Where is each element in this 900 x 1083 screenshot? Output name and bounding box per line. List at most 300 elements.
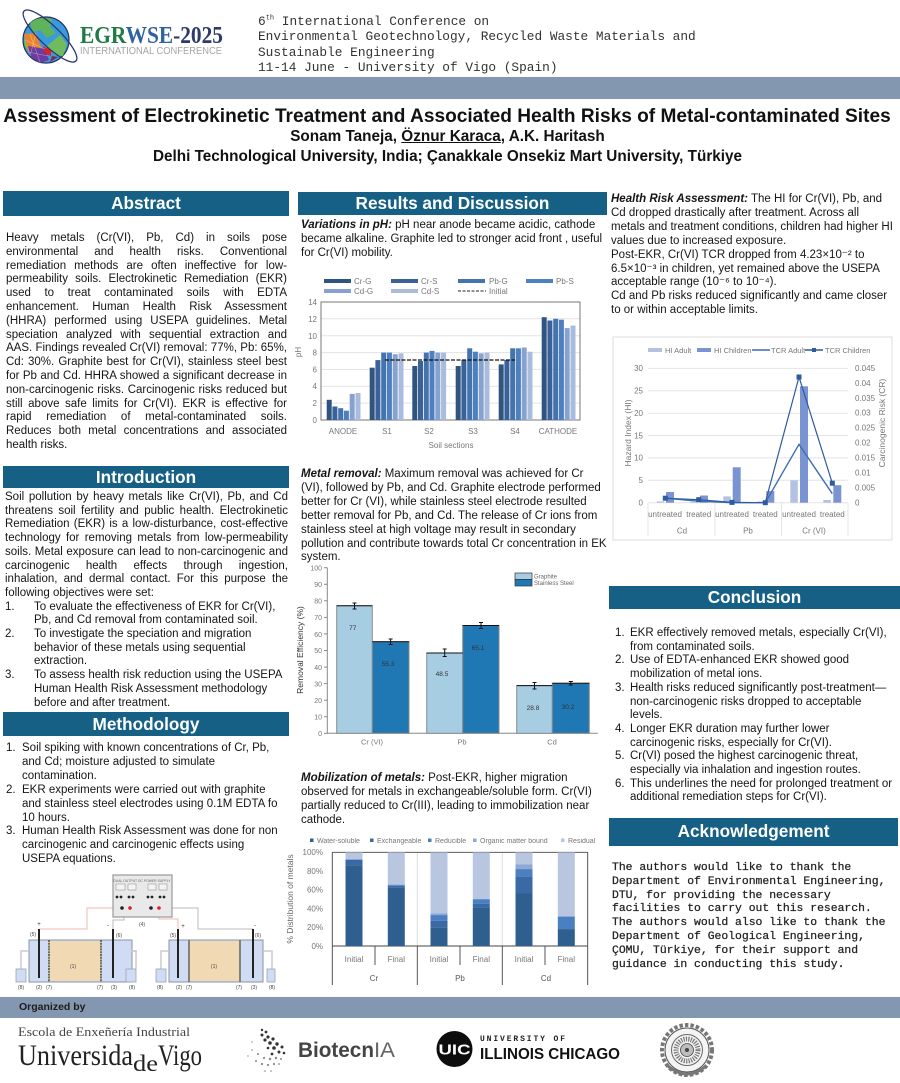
panel: health risk assessment text: Cd and Pb risks reduced significantly and came closer <box>611 290 887 302</box>
logo: Universidade de Vigo: Universida <box>18 1039 133 1072</box>
introduction text: To assess health risk reduction using the USEPA <box>34 669 282 681</box>
logo: University of Illinois Chicago <box>436 1031 620 1067</box>
axes: 40 <box>314 665 322 672</box>
introduction text <box>5 491 288 709</box>
methodology steps: USEPA equations. <box>22 853 116 865</box>
panel: abstract <box>3 191 289 451</box>
axis labels: 15 <box>634 431 644 440</box>
axis labels: treated <box>753 510 778 519</box>
heading: acknowledgement: Acknowledgement <box>678 821 829 841</box>
left cell: (1) <box>70 964 76 970</box>
heading: acknowledgement <box>609 818 898 846</box>
value labels: 30.2 <box>562 704 575 711</box>
initial pH dashed line <box>385 359 515 361</box>
heading: introduction: Introduction <box>96 467 196 487</box>
header: conference branding <box>22 9 696 75</box>
grid and axes: 14 <box>308 298 318 307</box>
conclusion list: non-carcinogenic risks dropped to acceptable <box>630 696 861 708</box>
axis labels: 0.03 <box>855 409 871 418</box>
text: metal removal: pollution and contribute towards total Cr concentration in EK <box>301 538 607 550</box>
axis labels: treated <box>686 510 711 519</box>
conclusion list: This underlines the need for prolonged treatment or <box>630 778 892 790</box>
heading: methodology <box>3 712 289 736</box>
axis labels: Cd <box>547 738 557 746</box>
value labels <box>349 625 575 712</box>
panel: health risk assessment text <box>611 193 893 316</box>
category labels: % Distribution of metals <box>285 854 295 944</box>
introduction text: extraction. <box>34 655 87 667</box>
axis labels: Cr (VI) <box>802 526 826 536</box>
panel: introduction <box>3 466 289 709</box>
heading: results and discussion <box>298 192 607 215</box>
logo: university seal <box>660 1023 714 1077</box>
legend: Pb-G <box>489 277 508 286</box>
acknowledgement text <box>612 862 885 971</box>
conclusion list: carcinogenic risks, especially for Cr(VI). <box>630 737 832 749</box>
bars <box>657 386 841 503</box>
axis labels: Removal Efficiency (%) <box>295 606 305 694</box>
legend: Cr-G <box>354 277 371 286</box>
axis labels: S3 <box>468 427 478 436</box>
axis labels: 20 <box>634 409 644 418</box>
axis labels: 30 <box>634 364 644 373</box>
axis labels: Soil sections <box>429 441 473 450</box>
axis labels: 0.035 <box>855 394 876 403</box>
axes and grid: 100% <box>303 848 323 857</box>
left cell: (3) <box>111 985 117 991</box>
abstract text: Cd: 30%. Graphite best for Cr(VI), stainless steel best <box>6 356 287 368</box>
acknowledgement text: The authors would like to thank the <box>612 862 851 874</box>
acknowledgement text: facilities to carry out this research. <box>612 903 872 915</box>
axis labels: 5 <box>639 476 644 485</box>
category labels: Initial <box>515 955 534 964</box>
logo: BiotecnIA: IA <box>374 1039 395 1062</box>
grid and axes: 12 <box>308 315 318 324</box>
conclusion list: additional remediation steps for Cr(VI). <box>630 791 827 803</box>
axes: 100 <box>310 566 322 572</box>
axes <box>310 566 598 738</box>
value labels: 55.3 <box>382 661 395 668</box>
logo: University of Illinois Chicago: ILLINOIS CHICAGO <box>480 1046 620 1063</box>
conclusion list: 4. <box>615 723 625 735</box>
logo: BiotecnIA <box>247 1028 395 1072</box>
text: variations in pH <box>301 219 602 259</box>
legend: Cr-S <box>421 277 437 286</box>
axis labels: Pb <box>457 738 467 746</box>
grid and axes: 0 <box>313 416 318 425</box>
heading: methodology: Methodology <box>93 714 199 734</box>
abstract text: used to treat contaminated soils with EDTA <box>6 287 287 299</box>
abstract text: environmental and health risks. Conventional <box>6 246 287 258</box>
conclusion list: 1. <box>615 627 625 639</box>
introduction text: To investigate the speciation and migration <box>34 628 251 640</box>
axis labels: 0.04 <box>855 379 871 388</box>
footer band <box>0 997 900 1018</box>
panel: health risk assessment text: 6.5×10⁻³ in children, yet remained above the USEPA <box>611 263 880 275</box>
abstract text: for Pb and Cd. HHRA showed a significant decrease in <box>6 370 287 382</box>
abstract text: rapid remediation of metal-contaminated soils. <box>6 411 287 423</box>
panel: acknowledgement <box>609 818 898 971</box>
axes: 50 <box>314 648 322 655</box>
panel: results and discussion <box>298 192 607 826</box>
axis labels: 10 <box>634 454 644 463</box>
value labels: 28.8 <box>527 705 540 712</box>
acknowledgement text: ÇOMU, Türkiye, for their support and <box>612 945 858 957</box>
conclusion list: 3. <box>615 682 625 694</box>
conference details: Sustainable Engineering <box>258 45 435 60</box>
text: mobilization of metals <box>301 772 592 826</box>
introduction text: inhalation, and dermal contact. For this purpose the <box>5 573 288 585</box>
left cell: (8) <box>129 985 135 991</box>
legend: TCR Children <box>825 346 870 355</box>
power supply <box>113 875 172 917</box>
axis labels: pH <box>294 347 303 357</box>
affiliations: Delhi Technological University, India; Çanakkale Onsekiz Mart University, Türkiye <box>153 148 742 165</box>
methodology steps: carcinogenic and carcinogenic effects using <box>22 839 244 851</box>
chart: pH by soil section <box>294 277 580 450</box>
methodology steps: and stainless steel electrodes using 0.1M EDTA for <box>22 798 277 810</box>
text: metal removal: better removal for Pb, and Cd. The release of Cr ions from <box>301 510 597 522</box>
abstract text: AAS. Findings revealed Cr(VI) removal: 77%, Pb: 65%, <box>6 342 287 354</box>
left cell: (6) <box>116 933 122 939</box>
legend <box>648 346 870 355</box>
stacked bars <box>346 852 575 946</box>
panel: health risk assessment text: Cd dropped drastically after treatment. Across all <box>611 207 859 219</box>
left cell: - <box>107 923 109 929</box>
category labels: Final <box>473 955 490 964</box>
axis labels: treated <box>820 510 845 519</box>
right cell: - <box>254 923 256 929</box>
heading: results and discussion: Results and Discussion <box>356 193 549 213</box>
category labels: Final <box>558 955 575 964</box>
axis labels: S2 <box>424 427 434 436</box>
logo: Universidade de Vigo: Escola de Enxeñería Industrial <box>18 1024 190 1039</box>
axis labels: 0.015 <box>855 454 876 463</box>
panel: health risk assessment text: Post-EKR, Cr(VI) TCR dropped from 4.23×10⁻² to <box>611 249 865 261</box>
category labels: Pb <box>455 974 465 983</box>
introduction text: Remediation (EKR) is a low-disturbance, cost-effective <box>5 518 288 530</box>
logo: EGRWSE-2025: EGRWSE-2025 <box>80 23 223 49</box>
axis labels <box>623 364 887 536</box>
heading: abstract: Abstract <box>111 193 181 213</box>
panel: health risk assessment text: acceptable range (10⁻⁶ to 10⁻⁴). <box>611 276 777 288</box>
text: metal removal <box>301 468 607 563</box>
conclusion list: especially via inhalation and ingestion routes. <box>630 764 861 776</box>
right cell: (3) <box>251 985 257 991</box>
axis labels: ANODE <box>329 427 357 436</box>
introduction text: Pb, and Cd removal from contaminated soil. <box>34 614 258 626</box>
methodology steps: Human Health Risk Assessment was done for non- <box>22 825 277 837</box>
legend: Graphite <box>534 574 558 580</box>
axes: 90 <box>314 582 322 589</box>
poster title: Assessment of Electrokinetic Treatment and Associated Health Risks of Metal-contaminated Sites <box>3 106 891 127</box>
abstract text: still above safe limits for Cr(VI). EKR is effective for <box>6 398 287 410</box>
legend: HI Adult <box>665 346 692 355</box>
axis labels: 0 <box>639 498 644 508</box>
axes: 0 <box>318 731 322 738</box>
category labels: Initial <box>430 955 449 964</box>
axes and grid: 20% <box>307 923 323 932</box>
introduction text: carcinogenic health effects through ingestion, <box>5 560 288 572</box>
conclusion list: Longer EKR duration may further lower <box>630 723 829 735</box>
axis labels: Hazard Index (HI) <box>623 399 633 467</box>
abstract text: Reduces both metal concentrations and associated <box>6 425 287 437</box>
grid and axes: 8 <box>313 348 318 358</box>
logo: University of Illinois Chicago: UIC <box>438 1042 471 1058</box>
axis labels: 0.005 <box>855 484 876 492</box>
diagram: electrokinetic setup <box>16 874 276 991</box>
right cell: (5) <box>170 933 176 939</box>
introduction text: before and after treatment. <box>34 697 170 709</box>
axis labels: Cd <box>677 526 687 536</box>
introduction text: following objectives were set: <box>5 587 154 599</box>
logos row <box>18 1023 714 1077</box>
logo: Universidade de Vigo: de <box>133 1051 158 1076</box>
introduction text: To evaluate the effectiveness of EKR for Cr(VI), <box>34 601 275 613</box>
conference details: Environmental Geotechnology, Recycled Waste Materials and <box>258 29 696 44</box>
introduction text: 3. <box>5 669 15 681</box>
axis labels: untreated <box>715 510 749 519</box>
bars <box>337 606 589 733</box>
acknowledgement text: The authors would also like to thank the <box>612 917 885 929</box>
introduction text: Soil pollution by heavy metals like Cr(VI), Pb, and Cd <box>5 491 288 503</box>
axis labels: Pb <box>743 526 753 536</box>
axes: 80 <box>314 598 322 606</box>
frame <box>613 337 892 540</box>
methodology steps: and Cd; moisture adjusted to simulate <box>22 756 215 768</box>
bars <box>327 317 576 420</box>
right cell: (2) <box>176 985 182 991</box>
conclusion list: from contaminated soils. <box>630 641 755 653</box>
wires <box>39 908 253 929</box>
conference details: 11-14 June - University of Vigo (Spain) <box>258 60 558 75</box>
conclusion list: mobilization of metal ions. <box>630 668 762 680</box>
legend: TCR Adult <box>771 346 806 355</box>
text: variations in pH: became alkaline. Graphite led to stronger acid front , useful <box>301 233 602 245</box>
conference details: 6th International Conference on <box>258 14 489 29</box>
legend: HI Children <box>714 346 752 355</box>
left cell: (5) <box>30 932 36 938</box>
grid and axes: 10 <box>308 332 318 341</box>
legend <box>324 277 574 296</box>
right cell: (7) <box>236 985 242 991</box>
left cell: (7) <box>97 985 103 991</box>
right cell: (7) <box>186 985 192 991</box>
left cell: (7) <box>46 985 52 991</box>
axes and grid: 80% <box>307 867 323 876</box>
text: variations in pH: for Cr(VI) mobility. <box>301 247 393 259</box>
axis labels <box>295 606 557 746</box>
text: metal removal: better for Cr (VI), while stainless steel electrode resulted <box>301 496 587 508</box>
legend <box>310 838 596 845</box>
methodology steps: 3. <box>6 825 16 837</box>
grid and axes: 2 <box>313 399 318 408</box>
risk lines <box>663 374 835 505</box>
abstract text: non-carcinogenic risks. Carcinogenic risks reduced but <box>6 384 287 396</box>
panel: health risk assessment text: Health Risk Assessment: The HI for Cr(VI), Pb, and <box>611 193 882 205</box>
panel: methodology <box>3 712 289 865</box>
axis labels: 0.01 <box>855 469 871 478</box>
grid and axes <box>308 298 580 425</box>
text: metal removal: Metal removal: Maximum removal was achieved for Cr <box>301 468 583 480</box>
panel: health risk assessment text: values due to increased exposure. <box>611 235 786 247</box>
conference details <box>258 14 696 75</box>
axes and grid: 40% <box>307 904 323 914</box>
legend: Exchangeable <box>377 838 421 845</box>
conclusion list <box>615 627 892 803</box>
abstract text: remediation methods are often ineffective for low- <box>6 260 287 272</box>
introduction text: technology for removing metals from low-permeability <box>5 532 288 544</box>
text: variations in pH: Variations in pH: pH near anode became acidic, cathode <box>301 219 595 231</box>
conclusion list: Health risks reduced significantly post-treatment— <box>630 682 886 694</box>
axes: 60 <box>314 632 322 639</box>
axis labels: CATHODE <box>539 427 577 436</box>
acknowledgement text: guidance in conducting this study. <box>612 959 844 971</box>
abstract text: enhancement. Human Health Risk Assessment <box>6 301 287 313</box>
axes: 70 <box>314 615 322 622</box>
axes: 10 <box>314 714 322 722</box>
methodology steps: contamination. <box>22 770 97 782</box>
authors: Sonam Taneja, Öznur Karaca, A.K. Haritash <box>290 128 605 145</box>
title block <box>3 106 891 165</box>
introduction text: behavior of these metals using sequential <box>34 642 246 654</box>
heading: conclusion: Conclusion <box>708 587 801 607</box>
left cell: (8) <box>18 985 24 991</box>
panel: health risk assessment text: metals and treatment conditions, children had higher HI <box>611 221 893 233</box>
axes and grid: 60% <box>307 886 323 894</box>
text: mobilization of metals: Mobilization of metals: Post-EKR, higher migration <box>301 772 568 784</box>
category labels: Initial <box>345 955 364 964</box>
chart: metal fractions <box>285 838 596 985</box>
right cell: (8) <box>269 985 275 991</box>
introduction text: soils. Metal exposure can lead to non-carcinogenic and <box>5 546 288 558</box>
acknowledgement text: Department of Geological Engineering, <box>612 931 865 943</box>
organized by label: Organized by <box>19 1001 86 1013</box>
legend: Organic matter bound <box>480 838 548 845</box>
axis labels: Carcinogenic Risk (CR) <box>877 378 887 467</box>
conclusion list: EKR effectively removed metals, especially Cr(VI), <box>630 627 887 639</box>
abstract text: (HHRA) performed using USEPA guidelines. Metal <box>6 315 287 327</box>
text: mobilization of metals: observed for metals in exchangeable/soluble form. Cr(VI) <box>301 786 592 798</box>
legend: Initial <box>489 287 508 296</box>
axis labels: S4 <box>510 427 520 436</box>
axis labels: 0 <box>855 498 860 508</box>
logo: University of Illinois Chicago: UNIVERSITY OF <box>480 1035 565 1044</box>
value labels: 65.1 <box>472 645 485 652</box>
logo: Universidade de Vigo: Vigo <box>158 1039 202 1072</box>
legend: Pb-S <box>556 277 574 286</box>
abstract text: health risks. <box>6 439 67 451</box>
methodology steps <box>6 742 277 865</box>
methodology steps: Soil spiking with known concentrations of Cr, Pb, <box>22 742 269 754</box>
top colour band <box>0 77 900 99</box>
axis labels: Cr (VI) <box>361 738 384 746</box>
conclusion list: 5. <box>615 750 625 762</box>
heading: introduction <box>3 466 289 488</box>
chart: removal efficiency <box>295 566 598 746</box>
right cell: + <box>181 924 185 930</box>
value labels: 48.5 <box>436 671 449 678</box>
axes: 20 <box>314 698 322 705</box>
axis labels: S1 <box>382 427 392 436</box>
conclusion list: 6. <box>615 778 625 790</box>
right cell: (6) <box>255 933 261 939</box>
text: metal removal: (VI), followed by Pb, and Cd. Graphite electrode performed <box>301 482 601 494</box>
legend: Reducible <box>435 838 466 845</box>
text: metal removal: system. <box>301 551 341 563</box>
axes and grid <box>303 848 588 985</box>
legend: Residual <box>568 838 596 845</box>
power supply: DUAL OUTPUT DC POWER SUPPLY <box>113 879 171 883</box>
right cell: (8) <box>157 985 163 991</box>
axis labels: untreated <box>648 510 682 519</box>
axis labels: 0.025 <box>855 424 876 433</box>
logo: BiotecnIA: Biotecn <box>298 1039 374 1062</box>
left cell: (4) <box>139 922 145 928</box>
grid and axes: 6 <box>313 366 318 374</box>
abstract text: speciation analyzed with sequential extraction and <box>6 329 287 341</box>
legend: Stainless Steel <box>534 581 574 587</box>
axis labels <box>294 347 577 450</box>
category labels: Cd <box>541 974 551 983</box>
conclusion list: levels. <box>630 709 663 721</box>
right cell <box>156 923 275 991</box>
abstract text: permeability soils. Electrokinetic Remediation (EKR) <box>6 273 287 285</box>
left cell: (2) <box>36 985 42 991</box>
category labels: Final <box>388 955 405 964</box>
text: mobilization of metals: cathode. <box>301 814 345 826</box>
axes: 30 <box>314 682 322 688</box>
conclusion list: Use of EDTA-enhanced EKR showed good <box>630 654 849 666</box>
legend <box>515 573 574 587</box>
text: mobilization of metals: partially reduced to Cr(III), leading to immobilization near <box>301 800 589 812</box>
abstract text: Heavy metals (Cr(VI), Pb, Cd) in soils pose <box>6 232 287 244</box>
chart: hazard index and carcinogenic risk <box>612 336 892 540</box>
heading: abstract <box>3 191 289 216</box>
legend: Cd-S <box>421 287 439 296</box>
left cell: + <box>37 922 41 928</box>
logo: EGRWSE-2025: INTERNATIONAL CONFERENCE <box>80 46 222 57</box>
value labels: 77 <box>349 625 357 632</box>
axis labels: 25 <box>634 387 644 396</box>
bar tops and error bars <box>337 603 589 689</box>
panel: conclusion <box>609 586 900 803</box>
panel: health risk assessment text: to or within acceptable limits. <box>611 304 758 316</box>
left cell <box>16 922 145 991</box>
introduction text: 2. <box>5 628 15 640</box>
conclusion list: 2. <box>615 654 625 666</box>
conclusion list: Cr(VI) posed the highest carcinogenic threat, <box>630 750 858 762</box>
acknowledgement text: DTU, for providing the necessary <box>612 890 831 902</box>
right cell: (1) <box>211 964 217 970</box>
introduction text: Human Health Risk Assessment methodology <box>34 683 267 695</box>
introduction text: 1. <box>5 601 15 613</box>
text: metal removal: stainless steel at high voltage may result in secondary <box>301 524 576 536</box>
axis labels: untreated <box>782 510 816 519</box>
abstract text <box>6 232 287 451</box>
heading: conclusion <box>609 586 900 609</box>
category labels <box>285 854 575 983</box>
introduction text: threatens soil fertility and public health. Electrokinetic <box>5 505 288 517</box>
legend: Cd-G <box>354 287 373 296</box>
logo: EGRWSE-2025 <box>22 9 223 64</box>
methodology steps: 10 hours. <box>22 812 70 824</box>
grid and axes: 4 <box>313 382 318 391</box>
grid <box>648 368 848 536</box>
acknowledgement text: Department of Environmental Engineering, <box>612 876 885 888</box>
methodology steps: EKR experiments were carried out with graphite <box>22 784 266 796</box>
logo: Universidade de Vigo <box>18 1024 202 1076</box>
